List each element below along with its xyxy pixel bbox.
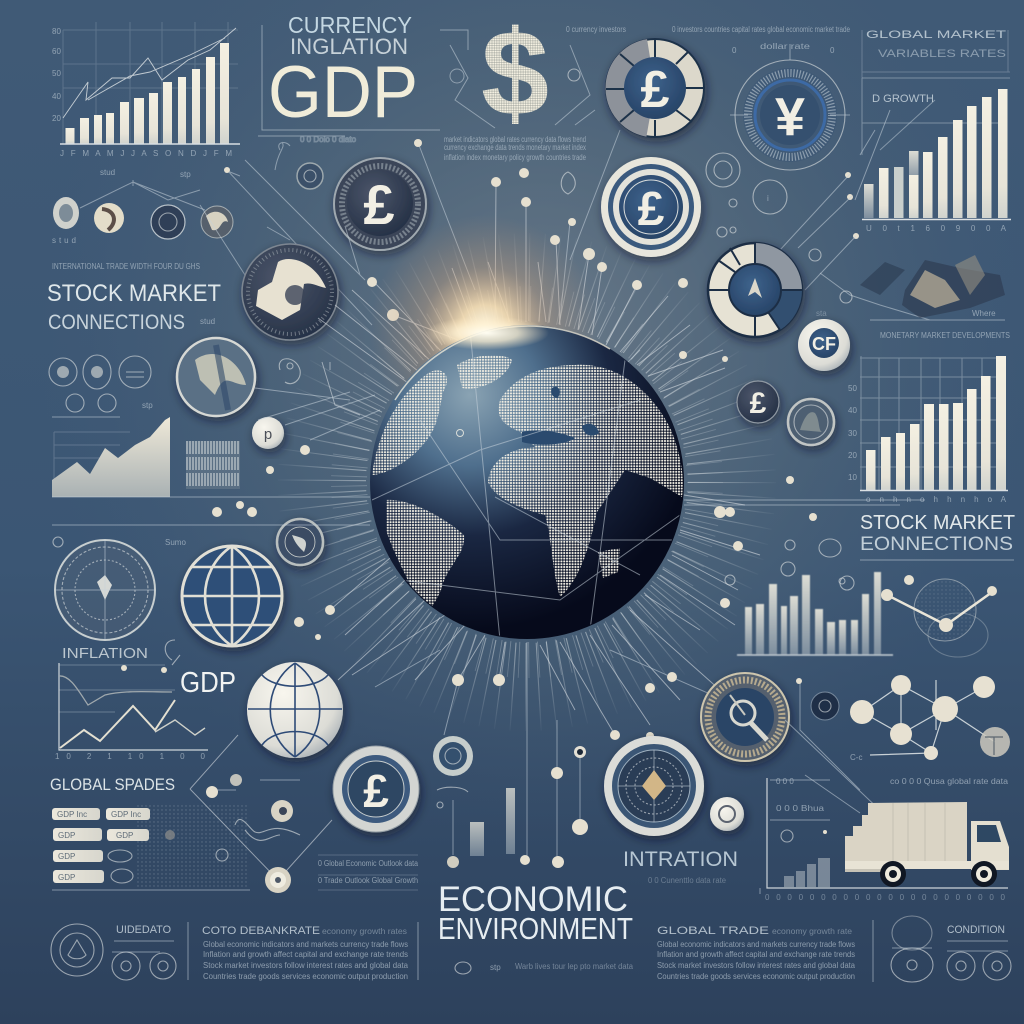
heading: stock market connections left: CONNECTIONS xyxy=(48,311,185,334)
network: node graph: C-c xyxy=(850,753,862,762)
heading: currency: CURRENCY xyxy=(288,12,412,38)
heading: global spades: GLOBAL SPADES xyxy=(50,775,175,794)
text block: bottom right: GLOBAL TRADE xyxy=(657,925,769,937)
axis labels: 80 xyxy=(52,27,61,36)
coin: small grey ring xyxy=(788,399,834,445)
coin: small pale xyxy=(710,797,744,831)
heading: stock market connections right xyxy=(860,512,1015,560)
sketch: dark market illustration: Where xyxy=(972,309,996,318)
coin: segmented euro: £ xyxy=(641,61,670,119)
text block: mid bottom xyxy=(318,855,418,890)
pin drop xyxy=(437,787,468,868)
heading: inflation: INFLATION xyxy=(62,645,148,662)
axis labels xyxy=(52,27,232,158)
axis labels: 20 xyxy=(52,114,61,123)
divider left xyxy=(187,922,189,980)
chart: top-right bar chart: U 0 t 1 6 0 9 0 0 A xyxy=(866,224,1007,233)
text block: bottom left: COTO DEBANKRATE xyxy=(202,925,320,937)
caption under intration: 0 0 Cunenttlo data rate xyxy=(648,876,727,885)
text block: bottom right: Countries trade goods services economic output production xyxy=(657,972,855,981)
small icon group: stp xyxy=(142,401,153,410)
small icons between coins: 0 xyxy=(830,46,835,55)
small disc right of GDP globe xyxy=(433,736,473,776)
heading: stock market connections left: stud xyxy=(200,317,215,326)
text line above stock market: INTERNATIONAL TRADE WIDTH FOUR DU GHS xyxy=(52,262,200,271)
axis labels: 50 xyxy=(52,69,61,78)
arrows: diagonals to top-right charts xyxy=(780,110,890,290)
chart: top-left rising bar chart with trend lines xyxy=(52,22,240,158)
bars xyxy=(879,89,1008,218)
heading: stock market connections right: STOCK MARKET xyxy=(860,512,1015,534)
chart: behind truck: 0 0 0 0 0 0 0 0 0 0 0 0 0 0 0 0 0 0 0 0 0 0 xyxy=(765,893,1006,902)
text block: bottom left: Countries trade goods services economic output production xyxy=(203,972,408,981)
small sketch icon near map coin xyxy=(255,359,380,440)
connector lines to left coins xyxy=(200,140,475,325)
continents: dotted xyxy=(372,355,683,611)
small cream coin xyxy=(252,417,284,449)
text block: mid bottom: 0 Global Economic Outlook data xyxy=(318,859,418,868)
network: upper node chain xyxy=(881,575,997,657)
caption under title: Warb lives tour lep pto market data xyxy=(515,962,634,971)
icons: row of small market tokens: stud xyxy=(52,236,76,245)
heading: economic environment: ECONOMIC xyxy=(438,880,628,919)
text block: bottom left: economy growth rates xyxy=(322,927,407,936)
decorative sketch lines near GDP xyxy=(258,25,495,170)
small icons between coins: i xyxy=(767,194,769,203)
bars xyxy=(866,356,1006,490)
coin: dark pound xyxy=(334,158,426,250)
coin: pound with silver rim xyxy=(333,746,419,832)
chart: right bar chart with grid: 20 xyxy=(848,451,857,460)
chart: inflation line chart: 10 2 1 10 1 0 0 xyxy=(55,752,206,761)
token 3 xyxy=(151,205,185,239)
bottom right icons xyxy=(891,916,1011,982)
token 2 xyxy=(94,203,124,233)
small icons between coins: 0 investors countries capital rates global economic market trade xyxy=(672,25,850,34)
axis labels: 40 xyxy=(52,92,61,101)
small icons between coins: 0 currency investors xyxy=(566,25,626,34)
small icon group xyxy=(49,355,153,417)
icon: wire globe xyxy=(182,546,282,646)
icons under title xyxy=(455,962,501,974)
bloom at top edge xyxy=(425,316,549,350)
small icons between coins: dollar rate xyxy=(760,42,811,51)
icon: delivery truck xyxy=(845,802,1009,887)
list: pill buttons: GDP xyxy=(116,831,133,840)
coin: CF button xyxy=(798,319,850,371)
text block: mid bottom: 0 Trade Outlook Global Growth xyxy=(318,876,418,885)
graticule xyxy=(372,330,680,640)
chart: behind truck: 0 0 0 xyxy=(776,777,794,786)
sketch: dark market illustration xyxy=(816,255,1005,320)
wheel xyxy=(880,861,906,887)
coin: yen dial: ¥ xyxy=(775,87,805,147)
rays: long connectors with end dots xyxy=(318,182,925,860)
icon: pearl globe xyxy=(247,662,343,758)
text block: bottom right xyxy=(657,925,856,981)
sketch: dark market illustration: sta xyxy=(816,309,827,318)
text block under dollar xyxy=(444,135,586,162)
coin: small euro xyxy=(737,381,779,423)
label top-left bottom half: Sumo xyxy=(165,538,186,547)
small icons between coins: 0 xyxy=(732,46,737,55)
bars xyxy=(66,43,229,144)
muted tall bars near title xyxy=(470,788,515,856)
text block under dollar: market indicators global rates currency data flows trend xyxy=(444,135,586,144)
globe xyxy=(370,316,684,640)
list: pill buttons: GDP Inc xyxy=(111,810,141,819)
coin: map ring xyxy=(177,338,255,416)
list: pill buttons xyxy=(52,808,250,890)
right column: top gibberish title: VARIABLES RATES xyxy=(878,48,1006,60)
bottom row: small icons and caption: UIDEDATO xyxy=(116,924,171,936)
heading: inflation: INGLATION xyxy=(290,34,408,59)
label top-left bottom half xyxy=(52,525,370,547)
text block: bottom left xyxy=(202,922,418,981)
rim highlight xyxy=(395,326,610,400)
caption row right: co 0 0 0 Qusa global rate data xyxy=(890,777,1009,786)
list: pill buttons: GDP Inc xyxy=(57,810,87,819)
heading: intration: INTRATION xyxy=(623,848,738,871)
text block: bottom right: Inflation and growth affect capital and exchange rate trends xyxy=(657,950,855,959)
axis labels: J F M A M J J A S O N D J F M xyxy=(60,149,232,158)
token 4 xyxy=(201,206,233,238)
glow: sunrise behind globe xyxy=(367,215,603,445)
dot mesh panel xyxy=(135,805,247,887)
small dark coin with line xyxy=(796,678,860,790)
icons: row of small market tokens: stp xyxy=(180,170,191,179)
axis labels: 60 xyxy=(52,47,61,56)
text block: bottom right: Global economic indicators and markets currency trade flows xyxy=(657,940,855,949)
heading: GDP: GDP xyxy=(268,52,418,133)
coin: yen dial xyxy=(730,44,850,170)
right column: top gibberish title: GLOBAL MARKET xyxy=(866,29,1006,41)
bottom row: small icons and caption xyxy=(112,924,176,980)
chart: right bar chart with grid xyxy=(848,356,1008,504)
right column: top gibberish title xyxy=(862,29,1010,78)
chart: inflation line chart xyxy=(55,663,208,761)
chart: right bar chart with grid: 30 xyxy=(848,429,857,438)
chart: area chart xyxy=(52,417,370,497)
network: node graph xyxy=(850,675,1010,762)
rays: fine radial burst around globe xyxy=(322,277,732,687)
small nodes below wire globe xyxy=(165,640,180,665)
list: pill buttons: GDP xyxy=(58,831,75,840)
chart: top-right bar chart: D GROWTH xyxy=(872,93,934,105)
text block: bottom right: economy growth rate xyxy=(772,927,853,936)
chart: right bar chart with grid: 40 xyxy=(848,406,857,415)
text block under dollar: inflation index monetary policy growth countries trade xyxy=(444,153,586,162)
chart: right bar chart with grid: o n h n o h h n h o A xyxy=(866,495,1007,504)
chart: right bar chart with grid: 10 xyxy=(848,473,857,482)
text block: bottom left: Inflation and growth affect capital and exchange rate trends xyxy=(203,950,408,959)
divider right xyxy=(872,920,874,982)
text block: bottom right: Stock market investors follow interest rates and global data xyxy=(657,961,856,970)
coin: segmented euro xyxy=(606,39,704,138)
coin: big digital ring xyxy=(604,736,704,836)
small icons mid right xyxy=(725,539,854,590)
icons under title: stp xyxy=(490,963,501,972)
coin: CF button: CF xyxy=(812,334,836,354)
muted bars xyxy=(864,151,918,218)
left mid: coin small xyxy=(277,519,323,565)
text block under dollar: currency exchange data trends monetary market index xyxy=(444,143,586,152)
diagram: diamond with eye xyxy=(165,735,332,893)
chart: right bar chart with grid: 50 xyxy=(848,384,857,393)
heading: stock market connections right: EONNECTIONS xyxy=(860,534,1013,555)
dots: ray end nodes xyxy=(212,139,859,868)
bottom right icons: CONDITION xyxy=(947,924,1005,936)
icons: row of small market tokens: stud xyxy=(100,168,115,177)
chart: top-right bar chart xyxy=(862,78,1011,233)
coin: segmented ring xyxy=(708,243,802,337)
small coin top xyxy=(297,163,323,189)
list: pill buttons: GDP xyxy=(58,852,75,861)
coin: dark with pale blotches xyxy=(242,244,338,340)
heading: GDP small: GDP xyxy=(180,667,236,699)
wheel xyxy=(971,861,997,887)
text line above chart: MONETARY MARKET DEVELOPMENTS xyxy=(880,331,1010,340)
coin: ringed pound: £ xyxy=(638,183,665,236)
token 1 xyxy=(53,197,79,229)
decorative sketch lines near GDP: 0 0 Dolo 0 dlato xyxy=(300,135,357,144)
icon: dollar sign: $ xyxy=(481,5,549,141)
heading: economic environment xyxy=(438,880,633,946)
bottom row: left emblem xyxy=(51,924,103,976)
chart: behind truck xyxy=(760,720,1008,902)
text block: bottom left: Global economic indicators and markets currency trade flows xyxy=(203,940,408,949)
heading: stock market connections left: STOCK MARKET xyxy=(47,280,221,307)
small cream coin: p xyxy=(264,426,272,443)
icons: row of small market tokens xyxy=(52,168,233,245)
chart: thin mid-right bars xyxy=(737,572,893,655)
text block: bottom left: Stock market investors follow interest rates and global data xyxy=(203,961,409,970)
coin: magnifier medallion xyxy=(701,673,789,761)
chart: barcode table xyxy=(186,441,240,489)
coin: pound with silver rim: £ xyxy=(363,765,389,817)
heading: stock market connections left xyxy=(47,280,221,334)
coin: dark pound: £ xyxy=(363,173,395,236)
chart: behind truck: 0 0 0 Bhua xyxy=(776,804,825,813)
coin: ringed pound xyxy=(601,157,701,257)
pin ring xyxy=(574,746,586,758)
coin: small euro: £ xyxy=(750,387,767,420)
heading: economic environment: ENVIRONMENT xyxy=(438,911,633,946)
icon: detailed circular emblem xyxy=(55,540,155,640)
small icons between coins xyxy=(555,25,850,380)
list: pill buttons: GDP xyxy=(58,873,75,882)
